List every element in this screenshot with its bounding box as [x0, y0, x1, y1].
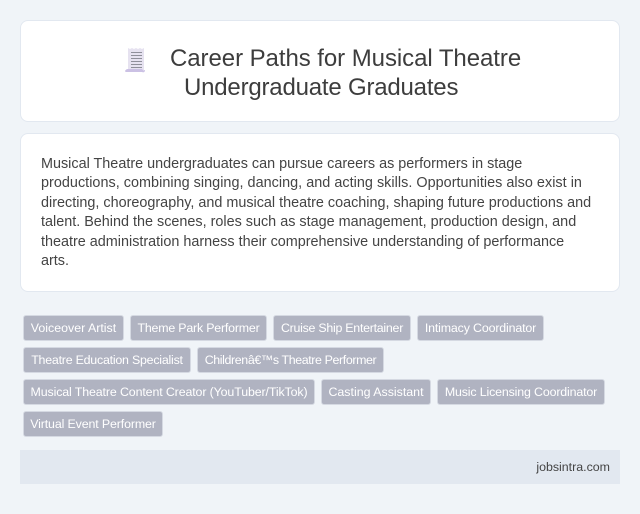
- tag: [417, 315, 544, 341]
- tag: Theatre Education Specialist: [31, 353, 183, 367]
- panel: title card: [20, 20, 620, 122]
- tag: [23, 379, 315, 405]
- tag: Voiceover Artist: [31, 321, 116, 335]
- footer bar: [20, 450, 620, 484]
- title line 1: Career Paths for Musical Theatre: [170, 45, 521, 72]
- tag: Virtual Event Performer: [30, 417, 156, 431]
- footer text: jobsintra.com: [536, 460, 610, 474]
- tag: [321, 379, 431, 405]
- tag: Cruise Ship Entertainer: [281, 321, 403, 335]
- tag: Intimacy Coordinator: [425, 321, 536, 335]
- tag: [273, 315, 411, 341]
- panel: description: [20, 133, 620, 292]
- description text: productions, combining singing, dancing, and acting skills. Opportunities also exist in: [41, 175, 582, 191]
- description text: Musical Theatre undergraduates can pursue careers as performers in stage: [41, 156, 522, 172]
- tag: [23, 315, 124, 341]
- description text: arts.: [41, 253, 69, 269]
- tag: Music Licensing Coordinator: [445, 385, 597, 399]
- description text: directing, choreography, and musical theatre coaching, shaping future productions and: [41, 194, 591, 210]
- tags: [23, 315, 605, 437]
- description text: theatre administration harness their comprehensive understanding of performance: [41, 234, 564, 250]
- tag: Casting Assistant: [328, 385, 424, 399]
- description text: [41, 156, 591, 269]
- description text: talent. Behind the scenes, roles such as stage management, production design, and: [41, 214, 576, 230]
- tag: Theme Park Performer: [137, 321, 260, 335]
- title line 2: Undergraduate Graduates: [184, 74, 458, 101]
- tag: Childrenâ€™s Theatre Performer: [205, 353, 376, 367]
- tag: [197, 347, 384, 373]
- tag: [23, 347, 191, 373]
- icon: document scroll: [125, 48, 145, 72]
- tag: [437, 379, 605, 405]
- tag: [130, 315, 267, 341]
- tag: [23, 411, 163, 437]
- tag: Musical Theatre Content Creator (YouTuber/TikTok): [31, 385, 307, 399]
